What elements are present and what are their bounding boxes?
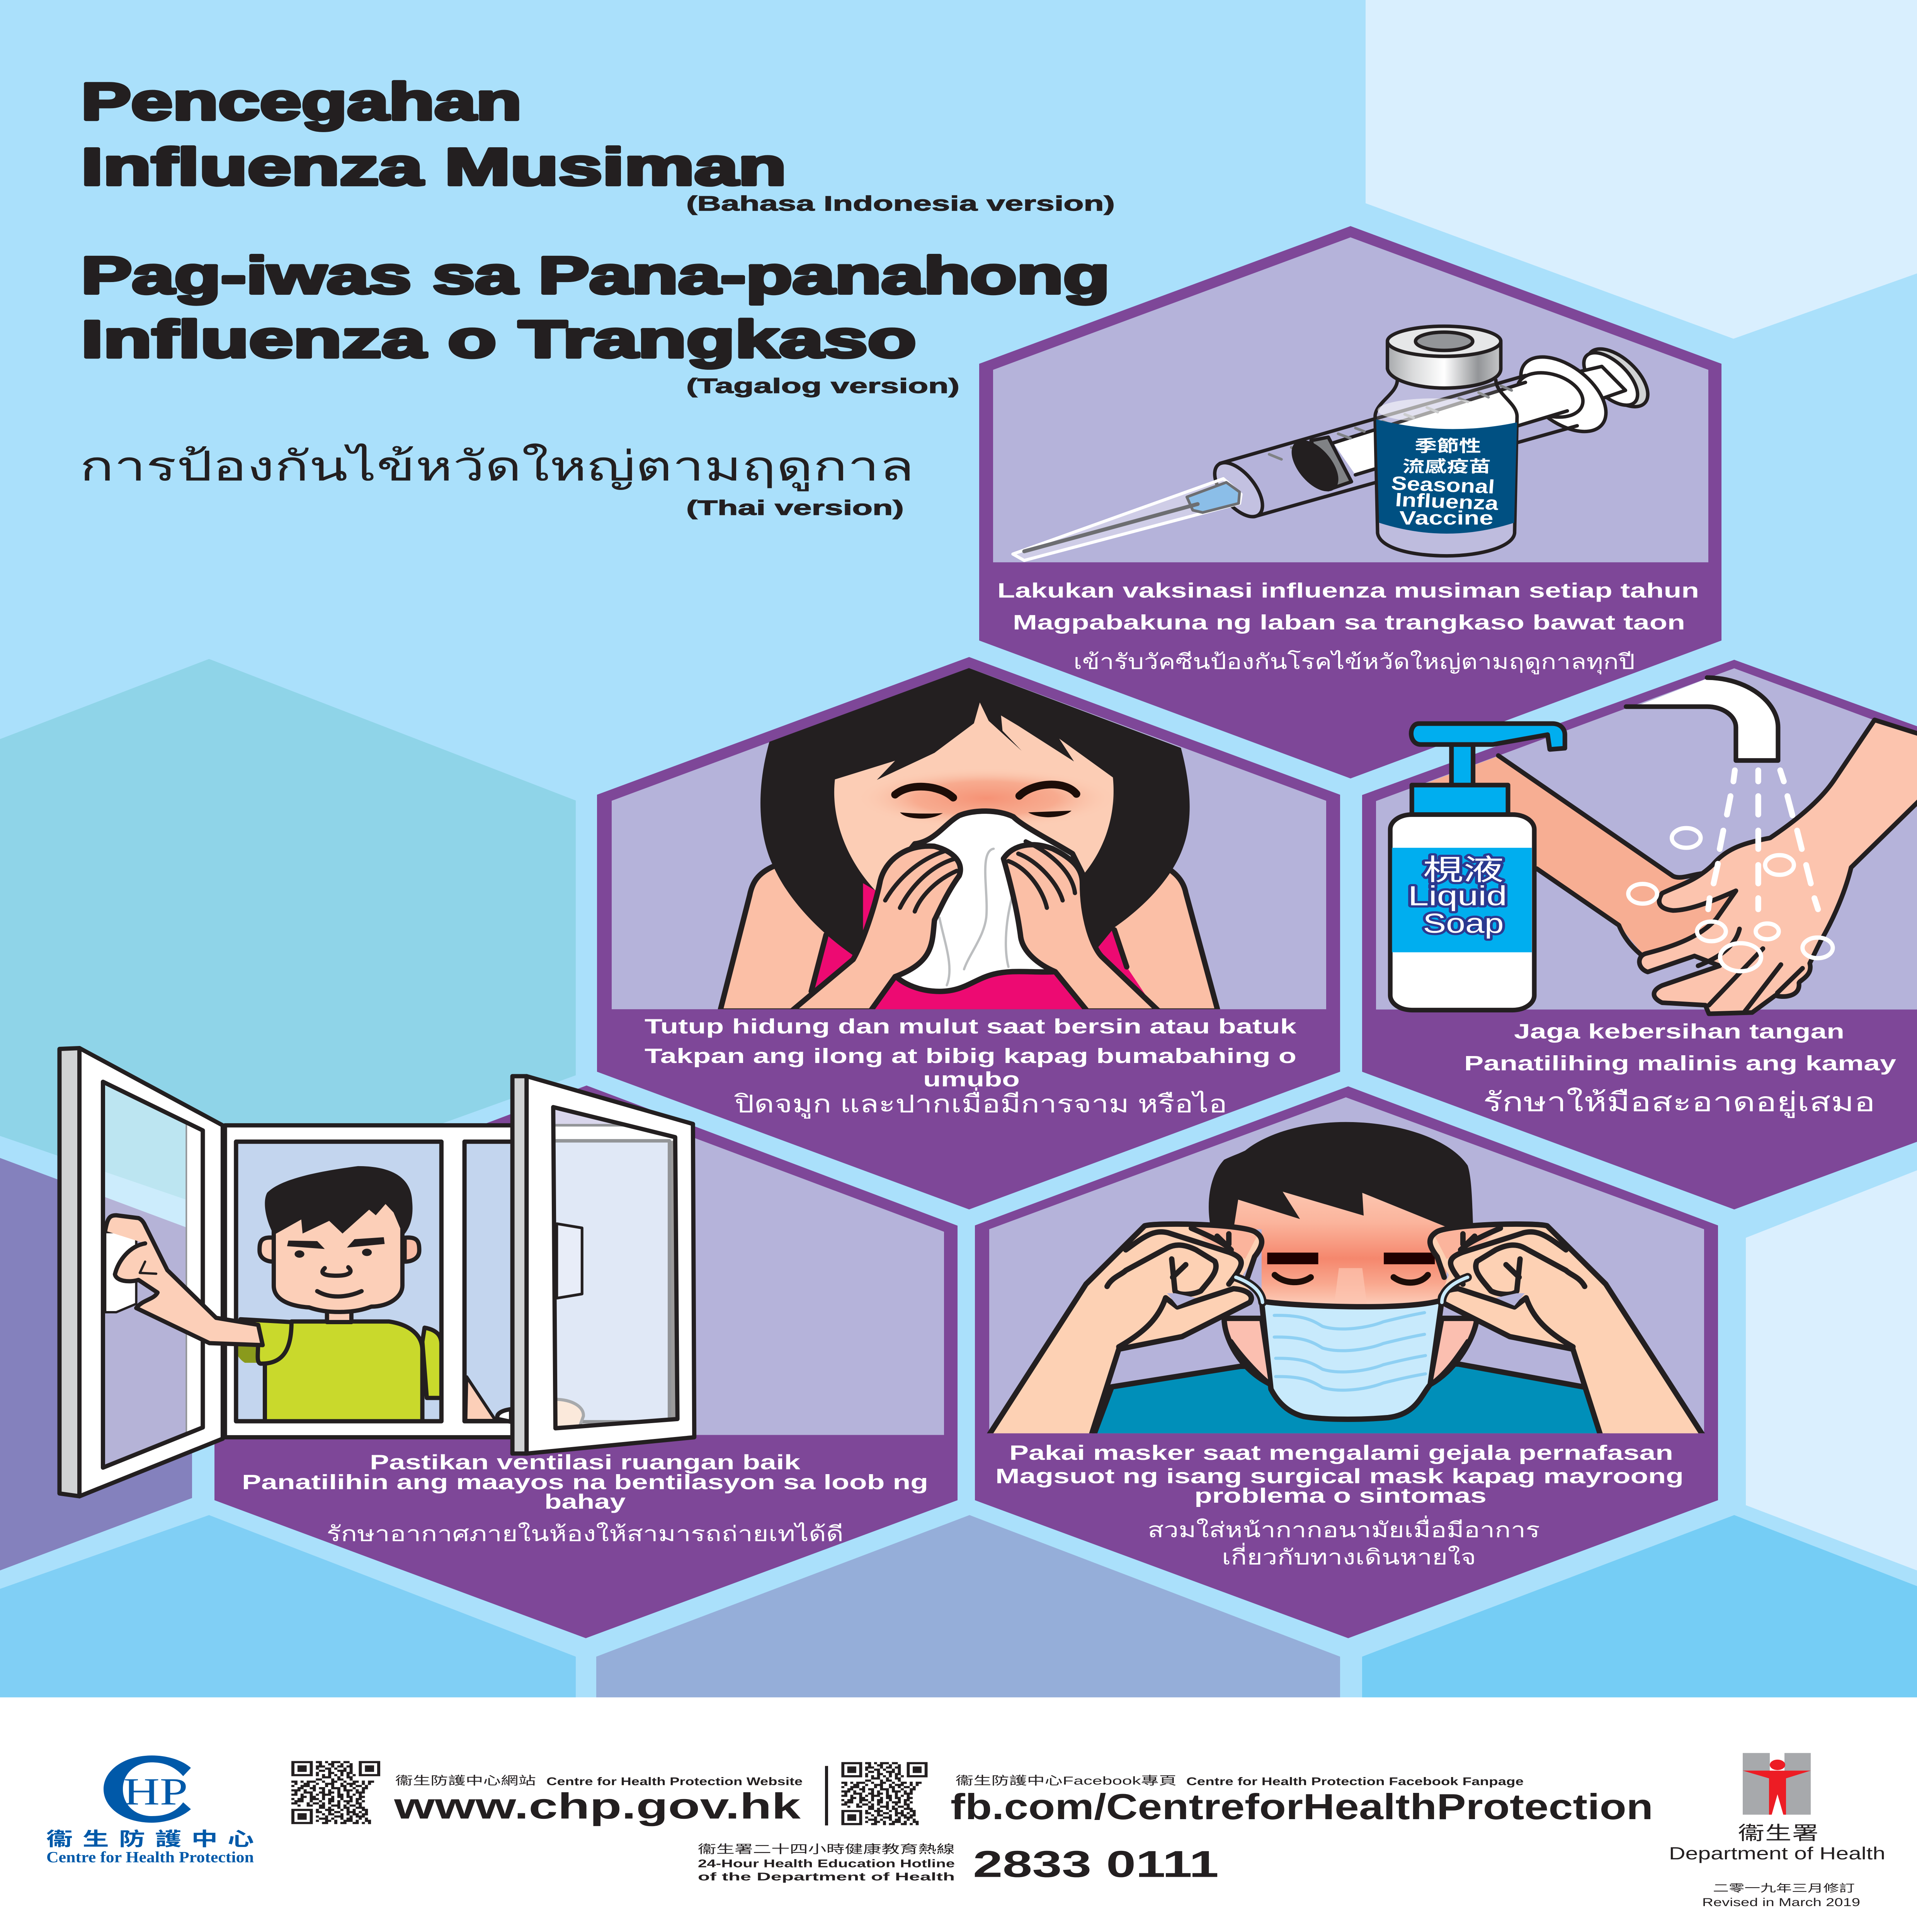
soap bottle label text: Liquid [1408, 881, 1507, 912]
title: Tagalog: (Tagalog version) [686, 374, 959, 397]
title: Tagalog: Pag-iwas sa Pana-panahong [81, 246, 1110, 304]
caption: cover nose and mouth: ปิดจมูก และปากเมื่อมีการจาม หรือไอ [734, 1087, 1227, 1119]
title: Thai [80, 443, 914, 519]
panel: cover nose and mouth [597, 657, 1340, 1209]
caption: ventilation: Panatilihin ang maayos na bentilasyon sa loob ng [242, 1470, 928, 1494]
QR code: Facebook [841, 1762, 927, 1825]
hexagon frame [214, 1085, 958, 1638]
caption: wearing a mask: Pakai masker saat mengalami gejala pernafasan [1009, 1441, 1673, 1464]
caption: hand hygiene: Panatilihing malinis ang kamay [1464, 1051, 1896, 1075]
footer: Facebook text: 衞生防護中心Facebook專頁 [956, 1774, 1177, 1787]
caption: wearing a mask [995, 1441, 1684, 1569]
title: Indonesian [81, 72, 1115, 215]
caption: ventilation [242, 1450, 928, 1546]
footer: hotline [698, 1843, 1219, 1885]
logo: Centre for Health Protection: 衞生防護中心 [46, 1829, 254, 1850]
caption: hand hygiene [1464, 1019, 1896, 1118]
soap bottle label text: Soap [1423, 908, 1504, 939]
logo: Department of Health: Department of Health [1669, 1844, 1885, 1863]
panel: hand hygiene [1362, 660, 1917, 1209]
title: Indonesian: Pencegahan [81, 72, 522, 131]
logo: Department of Health: 衞生署 [1738, 1823, 1818, 1844]
footer: hotline: 24-Hour Health Education Hotline [698, 1858, 955, 1870]
logo: Centre for Health Protection: HP [123, 1770, 188, 1813]
title: Tagalog: Influenza o Trangkaso [81, 310, 916, 368]
hexagon inner field [1376, 668, 1917, 1010]
vial label text: Seasonal [1390, 472, 1495, 498]
hand gripping left window handle [105, 1215, 263, 1345]
footer: hotline: 2833 0111 [973, 1843, 1219, 1885]
background hexagon: right pale [1746, 1170, 1917, 1570]
caption: cover nose and mouth: umubo [923, 1067, 1020, 1091]
soap bottle label text [1408, 854, 1507, 939]
hexagon inner field [228, 1097, 944, 1435]
vial label text [1390, 437, 1500, 529]
caption: ventilation: รักษาอากาศภายในห้องให้สามารถถ่ายเทได้ดี [327, 1522, 844, 1546]
left opened window leaf [60, 1048, 223, 1496]
panel: wearing a mask [975, 1086, 1718, 1638]
caption: vaccination: Magpabakuna ng laban sa trangkaso bawat taon [1013, 611, 1685, 634]
caption: wearing a mask: Magsuot ng isang surgical mask kapag mayroong [995, 1464, 1684, 1488]
soap bottle label text: 梘液 [1423, 854, 1504, 886]
footer: Facebook text: fb.com/CentreforHealthProtection [951, 1786, 1653, 1827]
logo: Department of Health [1669, 1753, 1885, 1863]
title: Indonesian: Influenza Musiman [81, 138, 786, 196]
illustration: man opening window [60, 1048, 694, 1496]
hexagon frame [1362, 660, 1917, 1209]
background hexagon: left violet [0, 1158, 192, 1570]
caption: cover nose and mouth: Tutup hidung dan mulut saat bersin atau batuk [645, 1014, 1296, 1038]
footer: revision date: Revised in March 2019 [1702, 1896, 1860, 1909]
caption: hand hygiene: รักษาให้มือสะอาดอยู่เสมอ [1483, 1087, 1875, 1118]
caption: wearing a mask: เกี่ยวกับทางเดินหายใจ [1222, 1543, 1476, 1569]
footer: white band [0, 1697, 1917, 1932]
caption: vaccination [997, 578, 1699, 675]
caption: vaccination: เข้ารับวัคซีนป้องกันโรคไข้หวัดใหญ่ตามฤดูกาลทุกปี [1073, 650, 1635, 675]
illustration: woman sneezing into tissue [720, 668, 1218, 1011]
hexagon frame [597, 657, 1340, 1209]
vial label text: 流感疫苗 [1403, 457, 1491, 476]
footer: website text: Centre for Health Protection Website [546, 1776, 803, 1788]
footer: website text: 衞生防護中心網站 [395, 1774, 536, 1787]
illustration: syringe and vaccine vial [1013, 326, 1660, 560]
title: Tagalog [81, 246, 1110, 397]
logo: Centre for Health Protection: Centre for Health Protection [46, 1849, 254, 1866]
caption: wearing a mask: สวมใส่หน้ากากอนามัยเมื่อมีอาการ [1148, 1515, 1540, 1542]
caption: cover nose and mouth [645, 1014, 1296, 1119]
title: Thai: การป้องกันไข้หวัดใหญ่ตามฤดูกาล [80, 443, 914, 491]
footer: revision date [1702, 1882, 1860, 1909]
title: Thai: (Thai version) [686, 496, 904, 519]
footer: website text: www.chp.gov.hk [394, 1786, 801, 1827]
panel: ventilation [214, 1085, 958, 1638]
hexagon frame [975, 1086, 1718, 1638]
illustration: tap, soap pump and washing hands [1390, 678, 1917, 1014]
panel: vaccination [979, 226, 1721, 779]
vial label text: Influenza [1395, 489, 1500, 514]
QR code: website [291, 1761, 380, 1824]
background hexagon: top right pale [1366, 0, 1917, 339]
background hexagon: bottom left blue [0, 1515, 576, 1697]
footer: vertical divider [825, 1766, 828, 1825]
caption: wearing a mask: problema o sintomas [1194, 1484, 1487, 1507]
hexagon frame [979, 226, 1721, 779]
footer: Facebook text: Centre for Health Protection Facebook Fanpage [1186, 1776, 1524, 1788]
title: Indonesian: (Bahasa Indonesia version) [686, 192, 1115, 215]
caption: vaccination: Lakukan vaksinasi influenza musiman setiap tahun [997, 578, 1699, 602]
right opened window leaf [512, 1076, 694, 1454]
caption: ventilation: Pastikan ventilasi ruangan baik [370, 1450, 800, 1474]
vial label text: Vaccine [1400, 507, 1493, 529]
footer: hotline: of the Department of Health [698, 1871, 955, 1883]
background hexagon: bottom right blue [1362, 1515, 1917, 1697]
illustration: man putting on surgical mask [988, 1122, 1704, 1437]
footer: hotline: 衞生署二十四小時健康教育熱線 [698, 1843, 955, 1856]
footer: Facebook text [951, 1774, 1653, 1827]
hexagon inner field [993, 237, 1708, 562]
background hexagon: bottom centre periwinkle [596, 1515, 1340, 1697]
logo: Centre for Health Protection [46, 1755, 254, 1866]
hexagon inner field [989, 1097, 1704, 1433]
caption: hand hygiene: Jaga kebersihan tangan [1514, 1019, 1844, 1043]
background hexagon: left teal [0, 659, 576, 1208]
vial label text: 季節性 [1415, 437, 1481, 456]
footer: revision date: 二零一九年三月修訂 [1713, 1882, 1855, 1894]
caption: ventilation: bahay [544, 1490, 626, 1513]
caption: cover nose and mouth: Takpan ang ilong at bibig kapag bumabahing o [645, 1044, 1296, 1067]
hexagon inner field [612, 668, 1326, 1009]
